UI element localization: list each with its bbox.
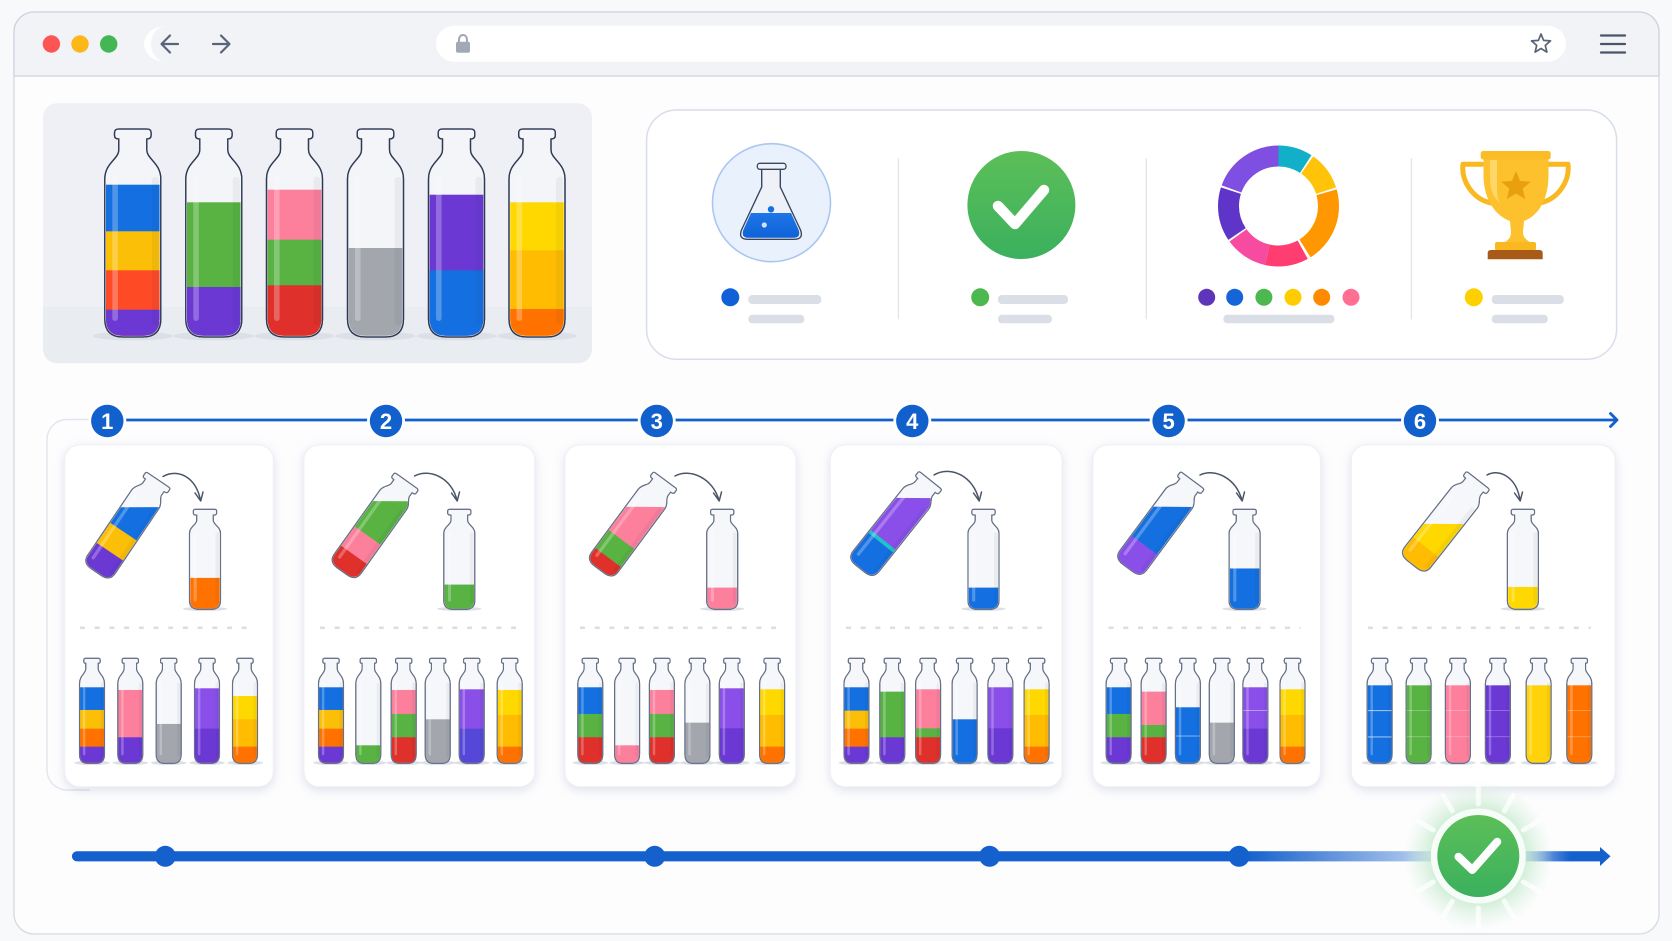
bottle 6	[497, 129, 577, 340]
bottle 5	[416, 129, 496, 340]
target bottle	[700, 509, 744, 612]
panel: step 6	[1351, 445, 1615, 787]
icon: flask	[712, 144, 830, 262]
legend: donut colours	[1198, 289, 1360, 323]
step 6 badge: 6	[1414, 409, 1426, 434]
donut chart	[1228, 156, 1328, 256]
pour arrow	[163, 473, 203, 501]
progress nodes	[155, 846, 1249, 867]
traffic lights	[43, 35, 117, 53]
address bar	[436, 26, 1566, 62]
panel: step 4	[830, 445, 1062, 787]
progress arrowhead	[1600, 847, 1610, 866]
step timeline	[88, 402, 1617, 440]
pouring bottle	[85, 472, 170, 578]
pouring bottle	[588, 472, 678, 576]
target bottle	[1501, 509, 1545, 611]
dividers	[898, 158, 1411, 319]
forward arrow	[213, 36, 230, 52]
bottle 1	[93, 129, 173, 341]
star icon	[1532, 34, 1550, 52]
target bottle	[183, 509, 227, 612]
target bottle	[437, 509, 481, 613]
step 3 badge: 3	[651, 409, 663, 434]
panel: step 3	[565, 445, 796, 787]
pour arrow	[414, 473, 460, 501]
step 4 badge	[893, 402, 931, 440]
shelf bottles	[1101, 658, 1310, 767]
step 4 badge: 4	[906, 409, 919, 434]
bottle 4	[336, 129, 416, 340]
pouring bottle	[1402, 471, 1490, 572]
panel: hero bottles	[43, 103, 592, 363]
panel: status icons	[647, 110, 1617, 359]
target bottle	[1222, 509, 1267, 612]
pour arrow	[675, 473, 722, 501]
icon: green check	[967, 151, 1075, 259]
shelf bottles	[572, 658, 790, 767]
pouring bottle	[1117, 472, 1204, 575]
shelf bottles	[74, 658, 263, 767]
step 6 badge	[1401, 402, 1439, 440]
pour arrow	[1487, 473, 1522, 501]
pouring bottle	[850, 471, 942, 576]
legend: trophy	[1465, 288, 1564, 323]
pour arrow	[934, 471, 982, 501]
back button crescent and arrow	[144, 26, 178, 62]
step 5 badge: 5	[1162, 409, 1175, 434]
icon: trophy	[1463, 151, 1568, 259]
bracket outline around steps	[47, 420, 90, 790]
pouring bottle	[332, 472, 419, 578]
lock icon	[456, 35, 470, 53]
bottle 3	[254, 129, 334, 340]
bottle 2	[174, 129, 254, 342]
step 2 badge: 2	[380, 409, 392, 434]
panel: step 1	[65, 445, 273, 787]
step 1 badge: 1	[101, 409, 113, 434]
shelf bottles	[313, 658, 528, 768]
step 3 badge	[638, 402, 676, 440]
step 2 badge	[367, 402, 405, 440]
shelf bottles, all sorted	[1362, 658, 1597, 766]
browser toolbar	[14, 12, 1659, 76]
pour arrow	[1200, 473, 1244, 501]
panel: step 5	[1093, 445, 1320, 787]
panel: step 2	[304, 445, 535, 787]
bottom progress bar	[72, 781, 1610, 931]
step 5 badge	[1150, 402, 1188, 440]
shelf bottles	[839, 658, 1054, 769]
legend: check	[971, 288, 1068, 323]
target bottle	[961, 509, 1006, 612]
step 1 badge	[88, 402, 126, 440]
hamburger menu	[1601, 36, 1625, 52]
legend: flask	[721, 288, 821, 323]
success badge	[1403, 781, 1553, 931]
